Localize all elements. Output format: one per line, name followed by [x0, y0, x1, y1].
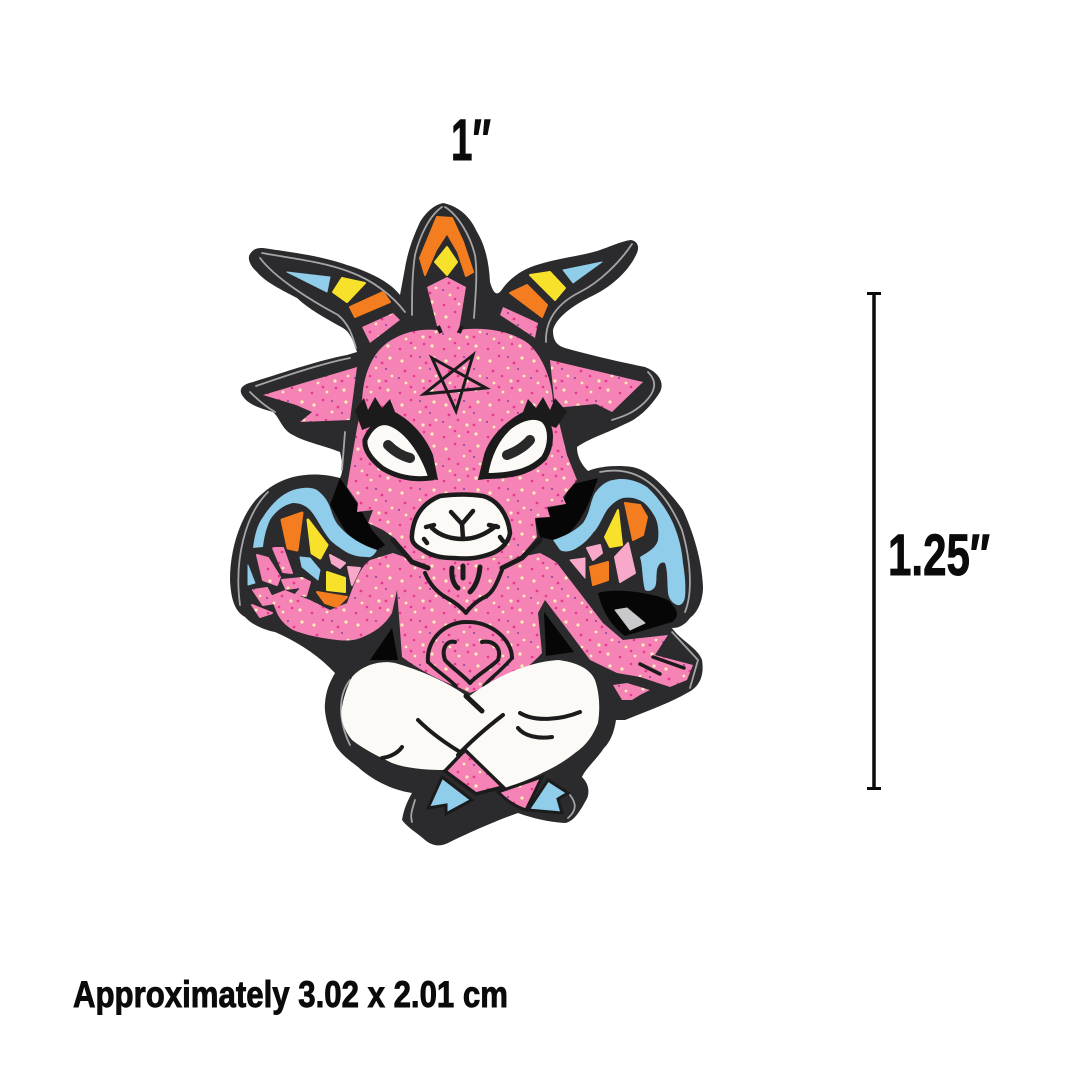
height ruler: [867, 293, 881, 790]
ruler line: [872, 293, 876, 790]
horn right: [500, 262, 602, 338]
hooves: [428, 777, 568, 814]
wing membrane: [553, 479, 685, 605]
thumb: [282, 578, 310, 596]
body linework: [393, 540, 684, 686]
feather lower orange: [317, 592, 347, 607]
gap beside cheek left: [330, 478, 385, 556]
eye white: [485, 417, 550, 476]
hole under wing right: [598, 591, 677, 636]
heading: height dimension: 1.25″: [888, 523, 990, 588]
hand right fingers: [640, 657, 684, 674]
finger two: [273, 548, 292, 573]
mouth and nose: [424, 511, 503, 543]
ruler top cap: [867, 292, 881, 295]
gap beside cheek right: [535, 478, 598, 542]
wing hole glint: [615, 608, 645, 630]
feather pink two: [348, 567, 360, 585]
legs white: [341, 660, 599, 790]
horn left: [287, 272, 400, 343]
hand right small finger: [613, 683, 650, 700]
feather orange: [625, 503, 647, 540]
ear left: [263, 367, 357, 422]
pupil: [388, 445, 410, 458]
shin back: [498, 777, 542, 810]
black recesses: [330, 478, 677, 660]
eye white: [365, 423, 431, 479]
hand left fingers: [252, 548, 310, 617]
lashes: [355, 397, 438, 480]
feather yellow: [308, 520, 327, 558]
collar right: [502, 540, 540, 568]
pupil: [507, 440, 530, 455]
legs pink: [445, 750, 542, 810]
flame orange: [420, 217, 473, 276]
neck ticks: [438, 326, 462, 333]
belly circle: [428, 622, 512, 662]
heading: width dimension: 1″: [451, 108, 491, 173]
muzzle: [412, 494, 510, 559]
finger one: [257, 555, 280, 585]
feather lower yellow: [327, 572, 345, 592]
flame: [420, 217, 473, 276]
gap right of torso: [544, 612, 574, 656]
ear right: [550, 360, 643, 412]
wing membrane: [253, 488, 377, 557]
wing right: [553, 479, 685, 630]
feather small pink: [587, 545, 602, 560]
pink band: [500, 307, 538, 338]
flame yellow: [435, 247, 457, 275]
size note: Approximately 3.02 x 2.01 cm: [73, 974, 508, 1015]
gap left of torso: [370, 628, 398, 660]
feather blue: [300, 557, 320, 580]
collar left: [393, 540, 428, 568]
feather pink: [330, 555, 345, 568]
chest lines: [425, 570, 502, 613]
feather orange: [282, 513, 302, 550]
head: [347, 277, 577, 560]
lashes: [478, 397, 567, 480]
shin front: [445, 750, 503, 794]
small blue patch: [248, 565, 255, 585]
pink torso and arms: [270, 553, 693, 693]
feather yellow: [605, 510, 622, 547]
metal highlights: [238, 207, 698, 822]
orange band: [350, 292, 390, 317]
feather pink triangle: [570, 558, 585, 578]
muzzle shape: [412, 494, 510, 559]
blue tip: [287, 272, 330, 292]
finger four: [252, 605, 272, 617]
eye left: [355, 397, 438, 480]
pink band: [362, 313, 400, 343]
yellow band: [530, 272, 565, 300]
finger three: [253, 588, 275, 605]
belly tip: [428, 658, 512, 686]
pin illustration: [230, 203, 703, 845]
ruler bottom cap: [867, 787, 881, 790]
eye right: [478, 397, 567, 480]
pin metal silhouette: [230, 203, 703, 845]
pentagram: [424, 355, 486, 411]
feather pink: [615, 543, 635, 582]
feather lower orange: [590, 562, 608, 585]
heart spiral: [444, 642, 499, 683]
wing left: [248, 488, 377, 607]
crossed legs: [341, 660, 599, 790]
hoof right: [528, 780, 568, 813]
goatee: [452, 566, 480, 592]
hoof left: [428, 777, 472, 814]
orange band: [510, 285, 547, 317]
leg crossing lines: [382, 696, 580, 758]
yellow band: [333, 278, 365, 302]
blue tip: [563, 262, 602, 283]
